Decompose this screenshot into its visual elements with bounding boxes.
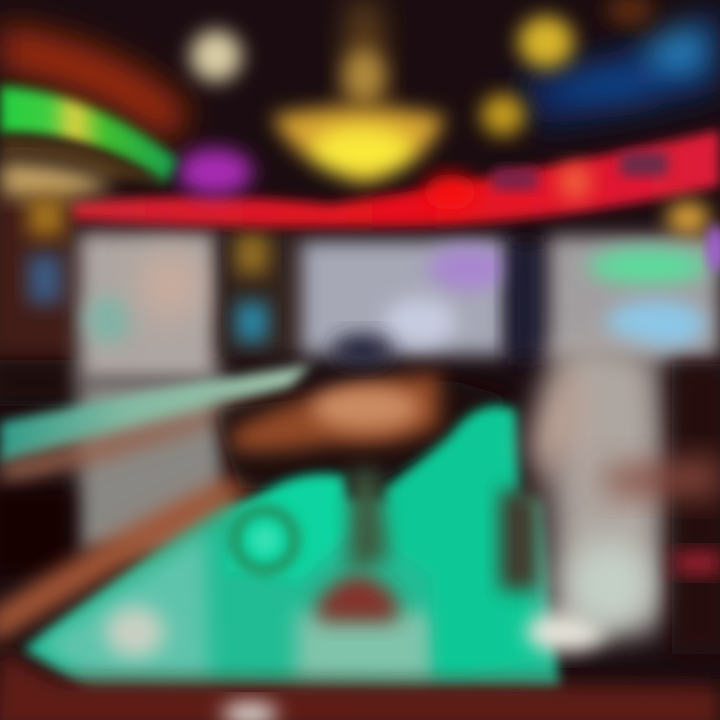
windows and back wall	[78, 228, 720, 382]
red neon band	[72, 130, 720, 227]
table: black shadow	[0, 488, 72, 576]
dealer: teal shirt right	[382, 406, 540, 680]
wall: left window warm patch	[138, 251, 202, 319]
dealer: dark shadow around torso	[215, 380, 520, 490]
central dealer	[215, 334, 540, 680]
dealer: dark vest	[348, 470, 388, 570]
dealer: skin highlight	[312, 386, 420, 430]
left wall	[0, 195, 80, 406]
figure: shoe	[526, 612, 606, 652]
edge: red arm	[600, 456, 720, 498]
wall: blue screen	[28, 254, 62, 304]
green and yellow neon canopy	[0, 86, 178, 236]
wall: centre window panel	[300, 240, 508, 355]
canopy: neon band	[0, 86, 178, 184]
table: wooden rail	[0, 468, 258, 646]
edge: dark block	[672, 364, 720, 654]
ceiling: blue glow top right	[520, 5, 720, 125]
canopy: amber post	[28, 198, 64, 236]
ceiling: top right amber light	[606, 0, 654, 26]
canopy: dark underside	[0, 136, 165, 184]
dealer: hand shadow	[500, 490, 540, 590]
sign: sky blue hat	[606, 300, 706, 348]
sign: amber top	[666, 201, 710, 235]
rail: white reflection	[222, 702, 278, 720]
right rainbow sign	[588, 201, 720, 348]
band: orange lamp	[559, 164, 591, 200]
table: far wall below window	[78, 380, 224, 550]
wall: centre window lilac glow	[428, 246, 508, 290]
wall: left window teal patch	[86, 296, 130, 344]
band: dark slot	[492, 168, 538, 190]
table: pale felt left	[40, 530, 210, 680]
sign: violet edge	[707, 224, 720, 272]
band: purple neon glow	[177, 148, 253, 196]
wall: amber pillar sign	[236, 234, 268, 274]
figure: body	[550, 340, 668, 630]
wall: brown column	[0, 195, 74, 365]
wall: centre window white glow	[384, 298, 456, 346]
dealer: chip ring	[235, 510, 295, 570]
red band details	[177, 148, 668, 210]
main green table	[0, 468, 560, 690]
light: chandelier stem	[344, 0, 386, 110]
standing figure in white	[526, 340, 668, 652]
table: felt surface	[22, 500, 560, 690]
ceiling and upper scene	[0, 0, 720, 184]
wall: blue pillar screen	[236, 302, 268, 342]
wall: right window panel	[548, 236, 720, 360]
dealer: teal shirt left	[225, 474, 354, 580]
wall: left window panel	[78, 232, 218, 382]
wall: dark base	[0, 360, 80, 406]
dealer: brown arms	[230, 372, 440, 452]
wall: dark pillar	[222, 228, 298, 358]
rail: red-brown wood	[0, 650, 720, 720]
figure: lower glow	[566, 539, 654, 631]
table: pale felt centre	[296, 612, 431, 682]
sign: green bar	[588, 248, 708, 284]
table: white chip stack	[105, 606, 165, 658]
right edge dark area	[600, 364, 720, 654]
figure: arm	[528, 360, 585, 490]
table: red rim	[0, 396, 270, 488]
light: yellow pendant	[518, 16, 574, 68]
light: cream pendant	[190, 30, 242, 82]
dealer: dark hair	[332, 334, 392, 366]
dealer: bright chip	[251, 526, 279, 554]
wall: dark pillar right	[508, 242, 544, 358]
dealer: red bow	[315, 575, 400, 622]
light: chandelier neck	[344, 50, 384, 102]
band: bright lamp left	[424, 174, 476, 210]
edge: red stripe	[674, 552, 720, 574]
light: large chandelier	[272, 107, 445, 184]
band: dark slot right	[620, 152, 668, 176]
ceiling: red arc top left	[0, 25, 190, 145]
left gaming table	[0, 364, 312, 576]
bottom wooden rail	[0, 650, 720, 720]
canopy: cream saucer	[0, 162, 115, 198]
light: small yellow pendant	[481, 94, 525, 136]
table: pale green top	[0, 364, 312, 464]
